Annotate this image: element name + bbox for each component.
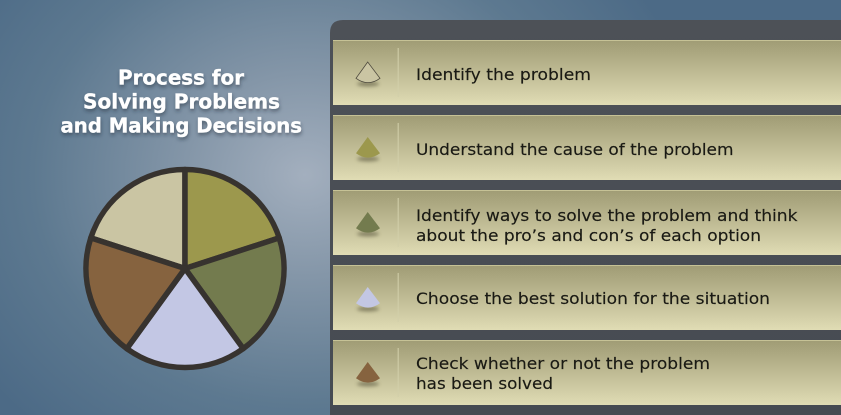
step 4 bbox=[333, 265, 841, 330]
slice: check whether solved bbox=[86, 238, 185, 349]
icon: green wedge bbox=[356, 212, 380, 233]
label: step 3 bbox=[416, 206, 798, 245]
slice: choose the best solution bbox=[127, 268, 243, 368]
label: step 5: Check whether or not the problem bbox=[416, 354, 710, 373]
title: Process for bbox=[118, 65, 244, 89]
icon: brown wedge bbox=[356, 362, 380, 383]
slice: identify ways to solve bbox=[185, 238, 284, 349]
slice: identify the problem bbox=[91, 169, 185, 268]
step 5 bbox=[333, 340, 841, 405]
slice: understand the cause bbox=[185, 170, 279, 268]
label: step 2: Understand the cause of the problem bbox=[416, 140, 734, 159]
pie chart bbox=[86, 169, 284, 368]
step 3 bbox=[333, 190, 841, 255]
label: step 3: Identify ways to solve the problem and think bbox=[416, 206, 798, 225]
icon: lavender wedge bbox=[356, 287, 380, 308]
icon: olive wedge bbox=[356, 137, 380, 158]
title bbox=[60, 65, 302, 138]
label: step 5 bbox=[416, 354, 710, 393]
step 1 bbox=[333, 40, 841, 105]
title: Solving Problems bbox=[83, 90, 280, 114]
icon: pale wedge bbox=[356, 62, 380, 83]
label: step 1: Identify the problem bbox=[416, 65, 591, 84]
panel: steps bbox=[330, 20, 841, 415]
label: step 3: about the pro’s and con’s of each option bbox=[416, 226, 761, 245]
step 2 bbox=[333, 115, 841, 180]
title: and Making Decisions bbox=[60, 114, 302, 138]
label: step 4: Choose the best solution for the situation bbox=[416, 289, 770, 308]
label: step 5: has been solved bbox=[416, 374, 553, 393]
